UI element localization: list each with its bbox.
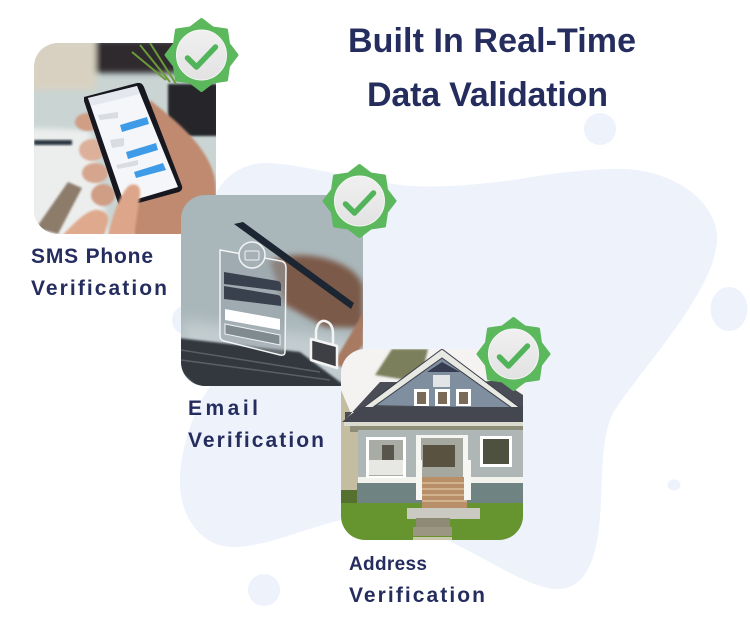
phone: [234, 222, 354, 309]
gable trim: [360, 349, 523, 410]
left porch: [366, 437, 406, 478]
pen: [34, 140, 72, 145]
dormer peak: [427, 362, 460, 372]
label: SMS phone verification: SMS Phone: [31, 245, 153, 268]
login form: [220, 250, 286, 355]
decorative circle: left: [172, 305, 202, 335]
background blob: [180, 163, 717, 589]
password field: [224, 286, 281, 306]
tree: [375, 349, 428, 382]
title: Data Validation: [367, 76, 608, 114]
label: address verification: Verification: [349, 584, 485, 607]
main roof band: [342, 407, 523, 422]
book: [36, 182, 82, 234]
fingertip: [338, 314, 363, 368]
hand: [270, 255, 363, 328]
username field: [224, 272, 281, 291]
lawn: [341, 503, 523, 540]
label: email verification: Email: [188, 397, 258, 420]
plant leaves: [132, 43, 176, 84]
padlock: [311, 339, 337, 368]
decorative circle: top: [584, 113, 616, 145]
badge: SMS verified: [166, 20, 237, 90]
label: email verification: Verification: [188, 429, 324, 452]
photo: phone login form above laptop: [178, 195, 363, 390]
label: email verification: [188, 397, 324, 452]
title: Built In Real-Time: [348, 22, 636, 60]
right window: [480, 436, 512, 467]
decorative circle: small right: [668, 480, 680, 490]
decorative circle: bottom: [248, 574, 280, 606]
login button: [225, 309, 280, 330]
photo: house with porch and lawn: [341, 349, 523, 541]
phone: [84, 83, 182, 207]
right hand: [134, 100, 216, 234]
signup button: [225, 324, 280, 345]
label: SMS phone verification: [31, 245, 167, 300]
landing and steps: [407, 508, 480, 519]
photo: hand holding phone with SMS messages: [30, 40, 220, 240]
label: address verification: Address: [349, 554, 427, 575]
badge: address verified: [478, 318, 549, 390]
upper windows: [414, 389, 429, 406]
side roofs: [345, 380, 523, 420]
decorative circle: right: [710, 287, 748, 331]
laptop keyboard: [181, 336, 341, 386]
badge: email verified: [324, 166, 395, 236]
label: SMS phone verification: Verification: [31, 277, 167, 300]
light band: [181, 320, 363, 386]
title: [348, 22, 636, 114]
thumb and finger: [108, 184, 140, 236]
label: address verification: [349, 554, 485, 607]
camera circle: [239, 242, 265, 268]
gable wall: [372, 358, 512, 408]
centre porch: [416, 435, 468, 480]
plant pot: [168, 84, 218, 136]
stairs: [422, 477, 467, 508]
walls: [358, 430, 523, 480]
fingers behind phone: [75, 113, 101, 131]
neighbour house: [341, 390, 358, 490]
